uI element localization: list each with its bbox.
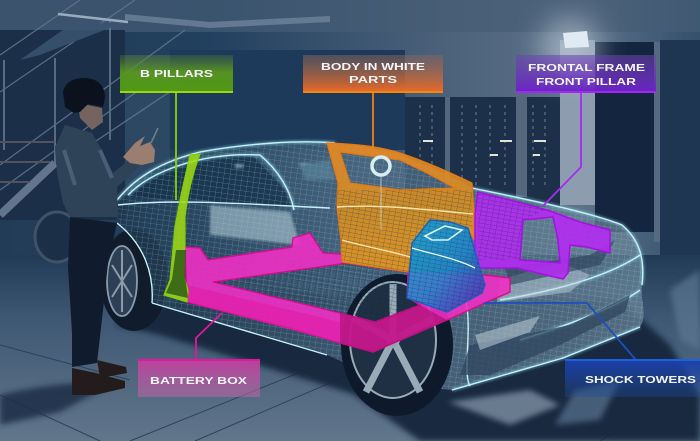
label: frontal frame front pillar: FRONT PILLAR: [536, 76, 637, 88]
label: shock towers: [565, 359, 700, 397]
phone: [151, 128, 158, 143]
rear wheel: [100, 229, 168, 331]
body highlight lines: [117, 142, 643, 390]
part: body in white door: [327, 143, 474, 272]
shoes: [72, 360, 127, 395]
label: frontal frame front pillar: [516, 55, 656, 93]
floor: [0, 255, 700, 441]
interior light patches: [210, 160, 335, 245]
connector: frontal frame: [543, 93, 581, 206]
label: body in white parts: BODY IN WHITE: [321, 61, 425, 73]
connector: battery box: [196, 313, 222, 360]
light patches on floor: [448, 270, 700, 425]
connector: B pillars: [175, 93, 177, 200]
server racks: [405, 97, 560, 207]
part: frontal frame: [475, 192, 610, 279]
wireframe mesh: [117, 142, 644, 390]
label: battery box: [138, 359, 260, 397]
car shadow on floor: [115, 290, 700, 441]
part: B pillar: [164, 154, 200, 302]
face: [78, 103, 103, 130]
legs: [68, 217, 117, 367]
staircase: [0, 0, 185, 215]
background: showroom wall and ceiling: [0, 0, 700, 270]
torso and arm: [55, 125, 143, 217]
door window sensor marker: [372, 157, 390, 230]
label: B pillars: [120, 55, 233, 93]
hair: [63, 78, 105, 113]
label: battery box: BATTERY BOX: [150, 375, 247, 387]
car: [117, 142, 644, 416]
front wheel: [341, 274, 453, 416]
label: frontal frame front pillar: FRONTAL FRAME: [528, 62, 645, 74]
grille and bumper details: [460, 240, 630, 375]
label: body in white parts: [303, 55, 443, 93]
part: battery box: [185, 233, 510, 352]
label: body in white parts: PARTS: [349, 74, 397, 86]
person: [55, 78, 158, 395]
connector: shock towers: [484, 303, 636, 360]
label: shock towers: SHOCK TOWERS: [585, 374, 696, 386]
background parked car wheel: [35, 212, 79, 262]
car body translucent shell: [117, 142, 644, 390]
part: shock tower: [407, 220, 485, 312]
sleeve highlight: [64, 150, 112, 185]
label: B pillars: B PILLARS: [140, 68, 213, 80]
hands: [123, 136, 155, 165]
side windows: [130, 153, 293, 208]
windows mesh: [130, 153, 293, 208]
body glow lines: [117, 142, 643, 390]
connector: body in white: [372, 93, 374, 148]
ceiling lamp: [540, 18, 600, 78]
